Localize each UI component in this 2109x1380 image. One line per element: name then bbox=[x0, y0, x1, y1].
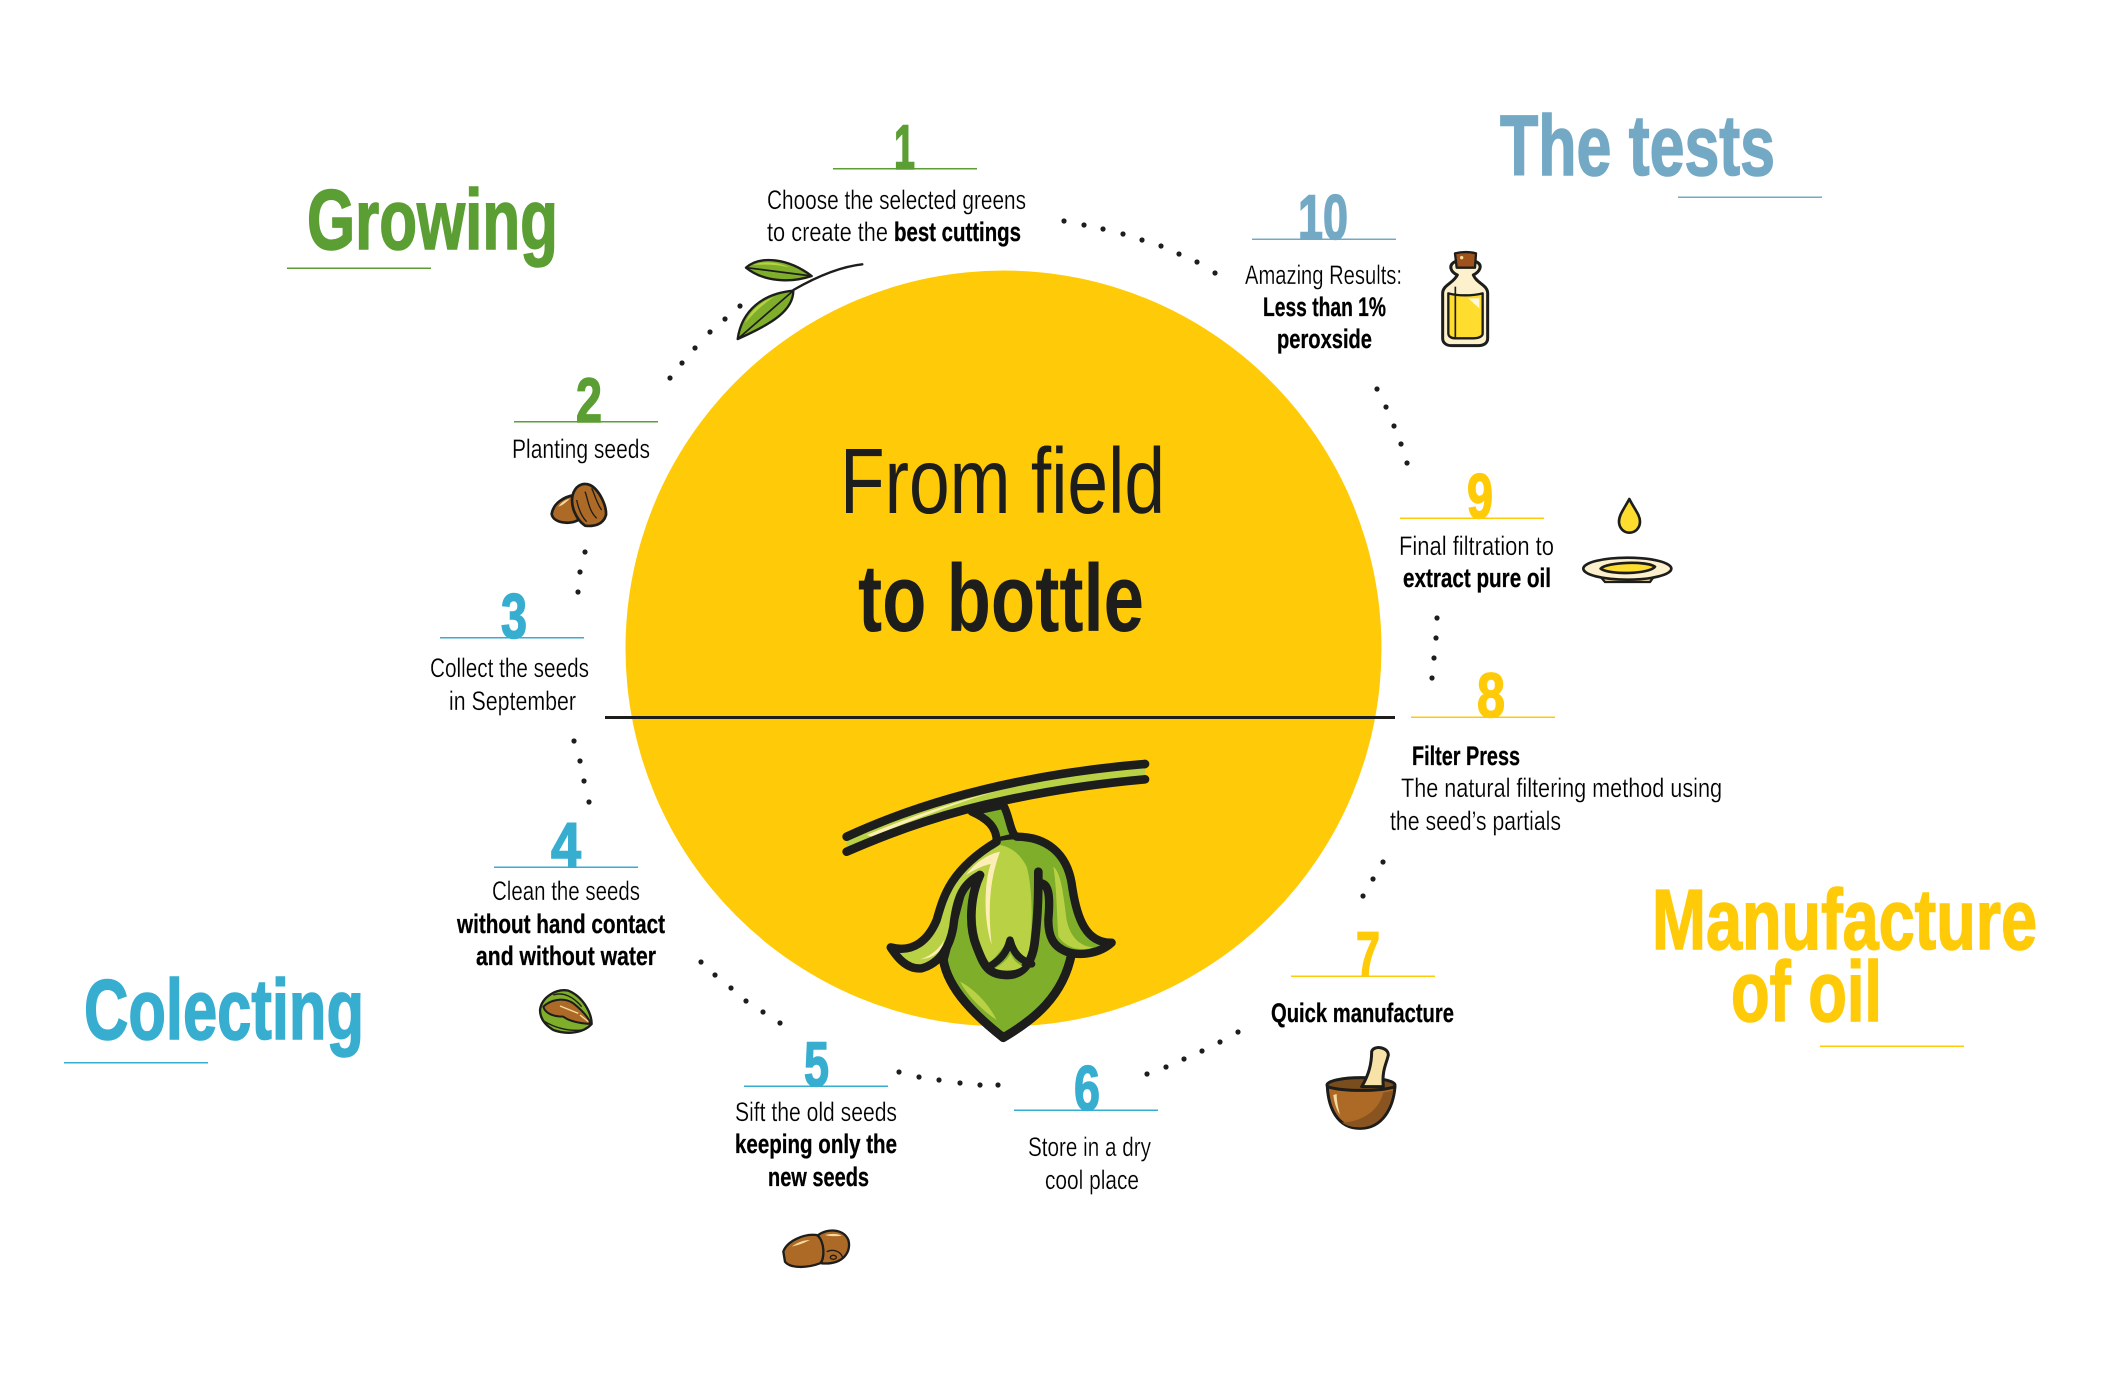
centre heading: From field to bottle bbox=[840, 429, 1165, 652]
step 4: clean the seeds: Clean the seeds bbox=[492, 876, 640, 906]
step 5: sift the old seeds bbox=[735, 1030, 897, 1192]
step 4: clean the seeds bbox=[456, 811, 665, 971]
step 5: sift the old seeds: 5 bbox=[804, 1030, 829, 1100]
heading: Colecting: Colecting bbox=[84, 963, 364, 1058]
icon: two seeds bbox=[552, 484, 606, 526]
step 4: clean the seeds: without hand contact bbox=[456, 909, 665, 939]
icon: oil drop and plate bbox=[1583, 499, 1671, 582]
step 6: store in a dry cool place: cool place bbox=[1045, 1165, 1139, 1195]
step 6: store in a dry cool place bbox=[1014, 1054, 1158, 1195]
step 3: collect the seeds: in September bbox=[449, 686, 576, 716]
dotted connector: step 2 to 1 bbox=[667, 303, 743, 381]
step 9: final filtration: Final filtration to bbox=[1399, 531, 1554, 561]
step 1: choose greens bbox=[767, 113, 1026, 247]
step 1: choose greens: 1 bbox=[894, 113, 915, 183]
icon: mortar and pestle bbox=[1327, 1048, 1395, 1128]
step 8: filter press: The natural filtering method using bbox=[1401, 773, 1722, 803]
dotted connector: step 8 to 7 bbox=[1360, 859, 1386, 899]
dotted connector: step 4 to 3 bbox=[571, 738, 592, 805]
step 5: sift the old seeds: new seeds bbox=[768, 1162, 869, 1192]
step 1: choose greens: to create the bbox=[767, 217, 888, 247]
centre heading: From field to bottle: to bottle bbox=[858, 545, 1144, 652]
step 7: quick manufacture: Quick manufacture bbox=[1271, 998, 1454, 1028]
step 9: final filtration: extract pure oil bbox=[1403, 563, 1551, 593]
icon: oil bottle bbox=[1443, 252, 1488, 346]
step 8: filter press: the seed’s partials bbox=[1390, 806, 1561, 836]
dotted connector: step 3 to 2 bbox=[575, 549, 588, 595]
step 10: amazing results: Less than 1% bbox=[1263, 292, 1386, 322]
dotted connector: step 9 to 8 bbox=[1429, 615, 1440, 681]
step 7: quick manufacture bbox=[1271, 920, 1454, 1028]
step 3: collect the seeds bbox=[430, 582, 589, 716]
heading: The tests: The tests bbox=[1500, 99, 1775, 194]
heading: Manufacture of oil bbox=[1652, 873, 2037, 1047]
step 8: filter press: Filter Press bbox=[1412, 741, 1520, 771]
dotted connector: step 6 to 5 bbox=[896, 1069, 1001, 1088]
step 2: planting seeds: Planting seeds bbox=[512, 434, 650, 464]
step 4: clean the seeds: and without water bbox=[476, 941, 656, 971]
step 5: sift the old seeds: Sift the old seeds bbox=[735, 1097, 897, 1127]
step 3: collect the seeds: 3 bbox=[501, 582, 527, 652]
step 8: filter press bbox=[1390, 661, 1722, 836]
icon: leaf cutting bbox=[738, 260, 862, 339]
step 6: store in a dry cool place: 6 bbox=[1074, 1054, 1100, 1124]
step 9: final filtration bbox=[1399, 462, 1554, 593]
icon: sifted seeds bbox=[783, 1230, 849, 1267]
central yellow circle bbox=[626, 270, 1382, 1026]
dotted connector: step 5 to 4 bbox=[698, 959, 783, 1026]
step 3: collect the seeds: Collect the seeds bbox=[430, 653, 589, 683]
step 7: quick manufacture: 7 bbox=[1356, 920, 1380, 990]
step 2: planting seeds: 2 bbox=[576, 366, 602, 436]
icon: green husked nut bbox=[540, 990, 592, 1033]
horizontal divider line bbox=[605, 716, 1395, 719]
step 1: choose greens: Choose the selected greens bbox=[767, 185, 1026, 215]
step 2: planting seeds bbox=[512, 366, 658, 464]
step 9: final filtration: 9 bbox=[1467, 462, 1493, 532]
dotted connector: step 7 to 6 bbox=[1144, 1029, 1241, 1077]
step 10: amazing results: Amazing Results: bbox=[1245, 260, 1402, 290]
step 8: filter press: 8 bbox=[1477, 661, 1505, 731]
step 1: choose greens: best cuttings bbox=[894, 217, 1021, 247]
step 10: amazing results: 10 bbox=[1298, 183, 1348, 253]
step 5: sift the old seeds: keeping only the bbox=[735, 1129, 897, 1159]
heading: Manufacture of oil: of oil bbox=[1731, 945, 1882, 1040]
icon: jojoba fruit on branch bbox=[847, 764, 1145, 1038]
step 6: store in a dry cool place: Store in a dry bbox=[1028, 1132, 1151, 1162]
step 10: amazing results: peroxside bbox=[1277, 324, 1372, 354]
step 10: amazing results bbox=[1245, 183, 1402, 354]
step 4: clean the seeds: 4 bbox=[551, 811, 581, 881]
dotted connector: step 1 to 10 bbox=[1061, 218, 1218, 276]
centre heading: From field to bottle: From field bbox=[840, 429, 1165, 533]
dotted connector: step 10 to 9 bbox=[1374, 386, 1410, 466]
heading: Growing: Growing bbox=[307, 173, 558, 268]
